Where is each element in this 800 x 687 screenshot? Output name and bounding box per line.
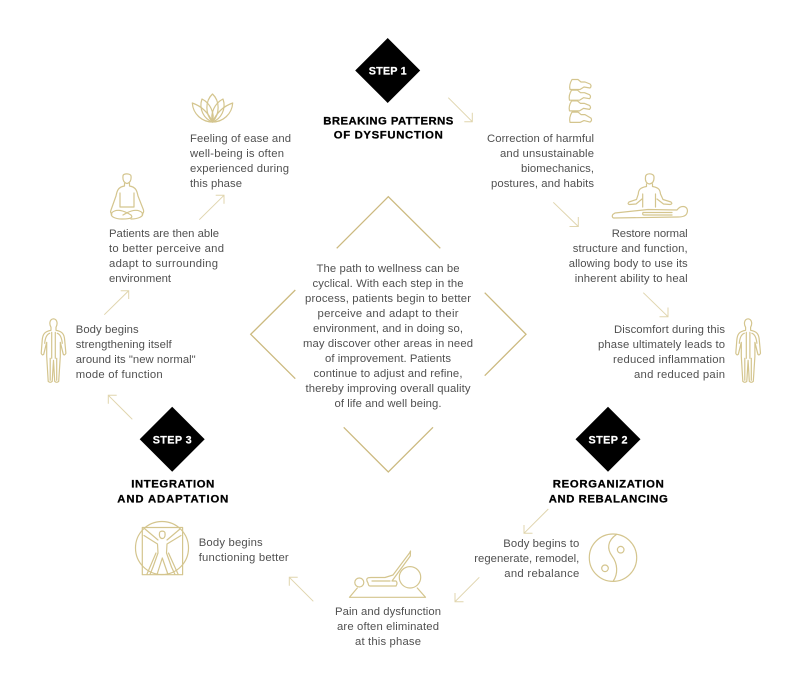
step 2 heading: REORGANIZATION: [553, 478, 664, 490]
icon: seated meditation figure: [111, 174, 144, 219]
text: regenerate remodel rebalance: and rebalance: [504, 568, 579, 580]
text: patients perceive and adapt: adapt to surrounding: [109, 258, 218, 270]
step 2 heading: AND REBALANCING: [549, 494, 668, 506]
step 3 heading: AND ADAPTATION: [117, 494, 228, 506]
icon: lotus: [192, 94, 233, 122]
arrow: regenerate to pain: [455, 577, 479, 602]
icon: yin yang: [589, 534, 637, 581]
text: discomfort leads to reduced pain: and reduced pain: [634, 369, 725, 381]
arrow: strengthening to perceive: [104, 291, 129, 315]
text: discomfort leads to reduced pain: [598, 324, 725, 381]
arrow: correction to restore: [553, 202, 578, 226]
text: ease and well-being: experienced during: [190, 163, 289, 175]
text: body strengthening: Body begins: [76, 324, 139, 336]
step 1 heading: [323, 116, 454, 142]
text: pain eliminated: [335, 606, 441, 648]
step 3 badge: STEP 3: [153, 434, 192, 446]
text: ease and well-being: well-being is often: [189, 148, 284, 160]
step 1 badge: [355, 38, 420, 103]
text: correction of biomechanics: biomechanics,: [521, 163, 594, 175]
center description text: may discover other areas in need: [303, 338, 473, 350]
text: pain eliminated: Pain and dysfunction: [335, 606, 441, 618]
text: restore structure and function: Restore normal: [612, 228, 688, 240]
text: correction of biomechanics: Correction of harmful: [487, 133, 594, 145]
arrow: step 1 to spine: [448, 98, 472, 122]
text: body strengthening: strengthening itself: [76, 339, 173, 351]
text: correction of biomechanics: and unsustainable: [500, 148, 594, 160]
step 2 heading: [549, 478, 668, 506]
text: body strengthening: [76, 324, 196, 381]
text: regenerate remodel rebalance: regenerate, remodel,: [474, 553, 579, 565]
central diamond frame: [251, 197, 526, 472]
step 3 heading: [117, 478, 228, 506]
text: patients perceive and adapt: [109, 228, 224, 285]
text: body functioning better: [199, 537, 289, 564]
arrow: pain to functioning: [289, 577, 313, 601]
arrow: perceive to ease: [199, 195, 224, 220]
center description text: thereby improving overall quality: [306, 383, 471, 395]
arrow: restore to discomfort: [643, 293, 668, 317]
text: pain eliminated: at this phase: [355, 636, 421, 648]
arrow: step 3 to strengthening: [108, 395, 132, 419]
arrow: step 2 to regenerate: [524, 509, 548, 533]
text: patients perceive and adapt: to better perceive and: [109, 243, 224, 255]
step 2 badge: [576, 407, 640, 472]
step 3 heading: INTEGRATION: [131, 478, 214, 490]
icon: practitioner and patient: [612, 174, 687, 218]
text: restore structure and function: structure and function,: [573, 243, 688, 255]
text: ease and well-being: Feeling of ease and: [190, 133, 291, 145]
icon: body figure left: [41, 319, 66, 382]
icon: spine: [569, 80, 592, 122]
text: body functioning better: Body begins: [199, 537, 263, 549]
text: ease and well-being: this phase: [190, 178, 242, 190]
text: body strengthening: around its "new normal": [76, 354, 196, 366]
text: regenerate remodel rebalance: [474, 538, 579, 580]
text: body strengthening: mode of function: [76, 369, 163, 381]
text: discomfort leads to reduced pain: phase ultimately leads to: [598, 339, 725, 351]
icon: vitruvian man: [136, 522, 188, 575]
step 1 heading: BREAKING PATTERNS: [323, 116, 454, 128]
center description text: [303, 263, 473, 410]
text: discomfort leads to reduced pain: reduced inflammation: [613, 354, 725, 366]
step 3 badge: [140, 407, 205, 472]
text: restore structure and function: [569, 228, 688, 285]
center description text: process, patients begin to better: [305, 293, 471, 305]
text: patients perceive and adapt: Patients are then able: [109, 228, 219, 240]
text: restore structure and function: allowing body to use its: [569, 258, 688, 270]
text: regenerate remodel rebalance: Body begins to: [503, 538, 579, 550]
text: patients perceive and adapt: environment: [109, 273, 172, 285]
text: ease and well-being: [189, 133, 291, 190]
center description text: of life and well being.: [334, 398, 442, 410]
center description text: continue to adjust and refine,: [314, 368, 462, 380]
center description text: The path to wellness can be: [316, 263, 460, 275]
text: pain eliminated: are often eliminated: [337, 621, 439, 633]
text: discomfort leads to reduced pain: Discomfort during this: [614, 324, 725, 336]
text: correction of biomechanics: postures, and habits: [491, 178, 594, 190]
icon: pilates pose with ball: [350, 551, 426, 597]
icon: body figure right: [736, 319, 760, 382]
center description text: perceive and adapt to their: [318, 308, 459, 320]
center description text: cyclical. With each step in the: [312, 278, 464, 290]
step 1 badge: STEP 1: [369, 66, 407, 78]
text: correction of biomechanics: [487, 133, 594, 190]
step 1 heading: OF DYSFUNCTION: [334, 130, 443, 142]
center description text: environment, and in doing so,: [313, 323, 463, 335]
text: body functioning better: functioning better: [199, 552, 289, 564]
step 2 badge: STEP 2: [588, 434, 628, 446]
text: restore structure and function: inherent ability to heal: [575, 273, 688, 285]
center description text: of improvement. Patients: [325, 353, 451, 365]
